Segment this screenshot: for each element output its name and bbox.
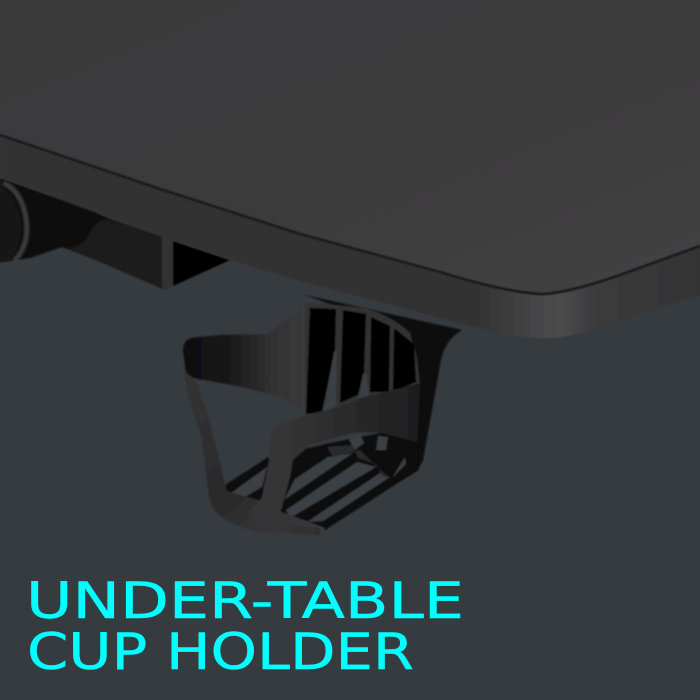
holder back band — [183, 303, 305, 412]
tray cross brace — [327, 445, 390, 478]
title — [26, 572, 464, 681]
cup holder — [183, 303, 420, 535]
tray gaps — [231, 453, 406, 522]
title line 1: UNDER-TABLE — [26, 572, 464, 630]
holder back panel — [305, 303, 420, 442]
knob and shaft — [0, 178, 112, 262]
holder front band — [248, 383, 420, 535]
holder slots — [306, 308, 416, 414]
desk top edge line — [0, 135, 700, 294]
desk corner support behind holder — [305, 295, 462, 484]
title line 2: CUP HOLDER — [27, 623, 414, 681]
slot see-through gaps — [323, 350, 388, 450]
holder left strap — [183, 352, 325, 535]
under-desk bracket — [62, 215, 230, 290]
desk top — [0, 0, 700, 293]
holder tray — [222, 432, 418, 530]
desk edge — [0, 136, 700, 338]
